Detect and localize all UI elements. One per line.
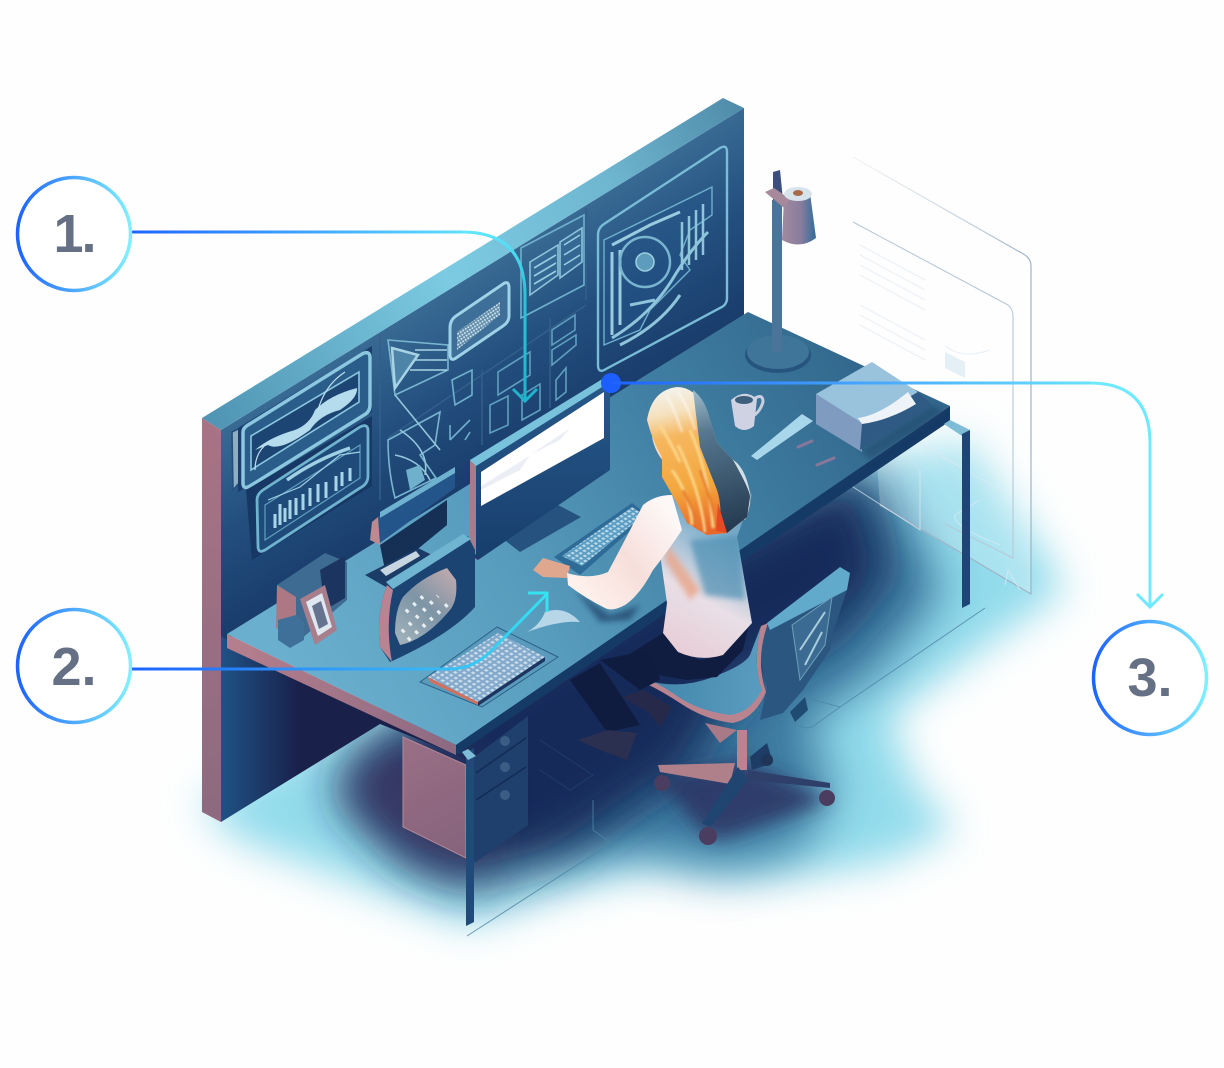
desk — [227, 312, 950, 755]
chair casters — [654, 754, 835, 845]
face — [652, 437, 664, 462]
monitor body — [470, 378, 610, 560]
chair back — [760, 590, 847, 720]
hair dark side — [693, 390, 750, 533]
desk front edge — [227, 634, 456, 755]
lamp pole — [772, 200, 782, 352]
tablet screen — [395, 568, 456, 645]
desk lamp — [745, 170, 816, 373]
callout badge 2: 2. — [51, 637, 97, 697]
stand — [380, 500, 447, 575]
partition wall — [202, 98, 744, 822]
keypad — [365, 548, 442, 587]
blueprint: document panel — [521, 215, 584, 318]
callout badge 1 — [18, 178, 130, 290]
cyan light pool — [200, 440, 1065, 925]
glass fill — [855, 158, 1030, 594]
front keyboard — [420, 627, 558, 707]
desk top — [227, 312, 950, 745]
callout line 3 — [601, 373, 1163, 607]
small monitor — [377, 470, 455, 543]
purple shadow near cabinet — [345, 745, 480, 875]
callout badge 3: 3. — [1127, 648, 1173, 708]
wall blueprint panels — [232, 147, 727, 560]
arm — [567, 495, 682, 609]
chair arm knob — [790, 697, 808, 722]
wall top edge — [202, 98, 744, 430]
monitor stand — [498, 504, 581, 552]
callout badge 3 — [1094, 622, 1206, 734]
tablet device — [379, 534, 475, 662]
lamp base — [745, 337, 811, 373]
monitor — [470, 378, 610, 560]
small cube — [278, 615, 304, 648]
glass outlines — [853, 157, 1031, 594]
chair shadow — [660, 760, 830, 840]
tray shadow — [860, 405, 945, 460]
hair strands — [660, 392, 716, 532]
blueprint: large machine — [598, 147, 727, 371]
back keyboard — [554, 503, 648, 575]
photo frame — [300, 585, 337, 645]
chair base — [658, 723, 830, 827]
paper tray — [816, 362, 945, 460]
legs — [570, 663, 640, 732]
desk legs — [462, 420, 970, 926]
storage box — [277, 553, 347, 640]
desk box and frame — [276, 553, 347, 648]
hair — [647, 387, 750, 535]
blueprint: dotted display — [450, 283, 509, 359]
wall front face — [221, 108, 744, 640]
drawer cabinet — [403, 716, 528, 862]
torso — [660, 490, 752, 658]
dark shadow under desk — [335, 470, 890, 885]
floor glow — [200, 440, 1065, 925]
glass panel — [850, 157, 1031, 594]
callout line 1 — [132, 232, 537, 401]
monitor screen — [481, 392, 604, 506]
shoes — [578, 730, 637, 760]
monitor top edge — [470, 378, 610, 466]
arm shadow — [575, 590, 640, 622]
desk side edge — [456, 406, 950, 755]
small equipment — [365, 467, 455, 587]
glass sketches — [850, 245, 1020, 590]
coffee mug — [731, 394, 763, 430]
mouse — [527, 610, 580, 632]
mid blue pool — [540, 470, 945, 868]
far shoulder — [730, 458, 750, 520]
callout line 2 — [132, 593, 547, 669]
ruler and clips — [751, 414, 834, 465]
callout badge 2 — [18, 610, 130, 722]
wall lower face — [221, 636, 470, 822]
woman at desk — [533, 387, 760, 760]
lamp shade — [782, 193, 816, 245]
office chair — [642, 567, 850, 845]
blueprint: top left — [232, 346, 372, 492]
blueprint: bottom left — [246, 416, 372, 560]
infographic canvas — [16, 98, 1208, 947]
callout badge 1: 1. — [53, 204, 95, 264]
floor guide lines — [467, 608, 985, 936]
chair seat — [645, 626, 762, 716]
blueprint: centre dividers and sketches — [380, 208, 586, 500]
hand — [533, 558, 570, 578]
wall end — [202, 418, 221, 822]
